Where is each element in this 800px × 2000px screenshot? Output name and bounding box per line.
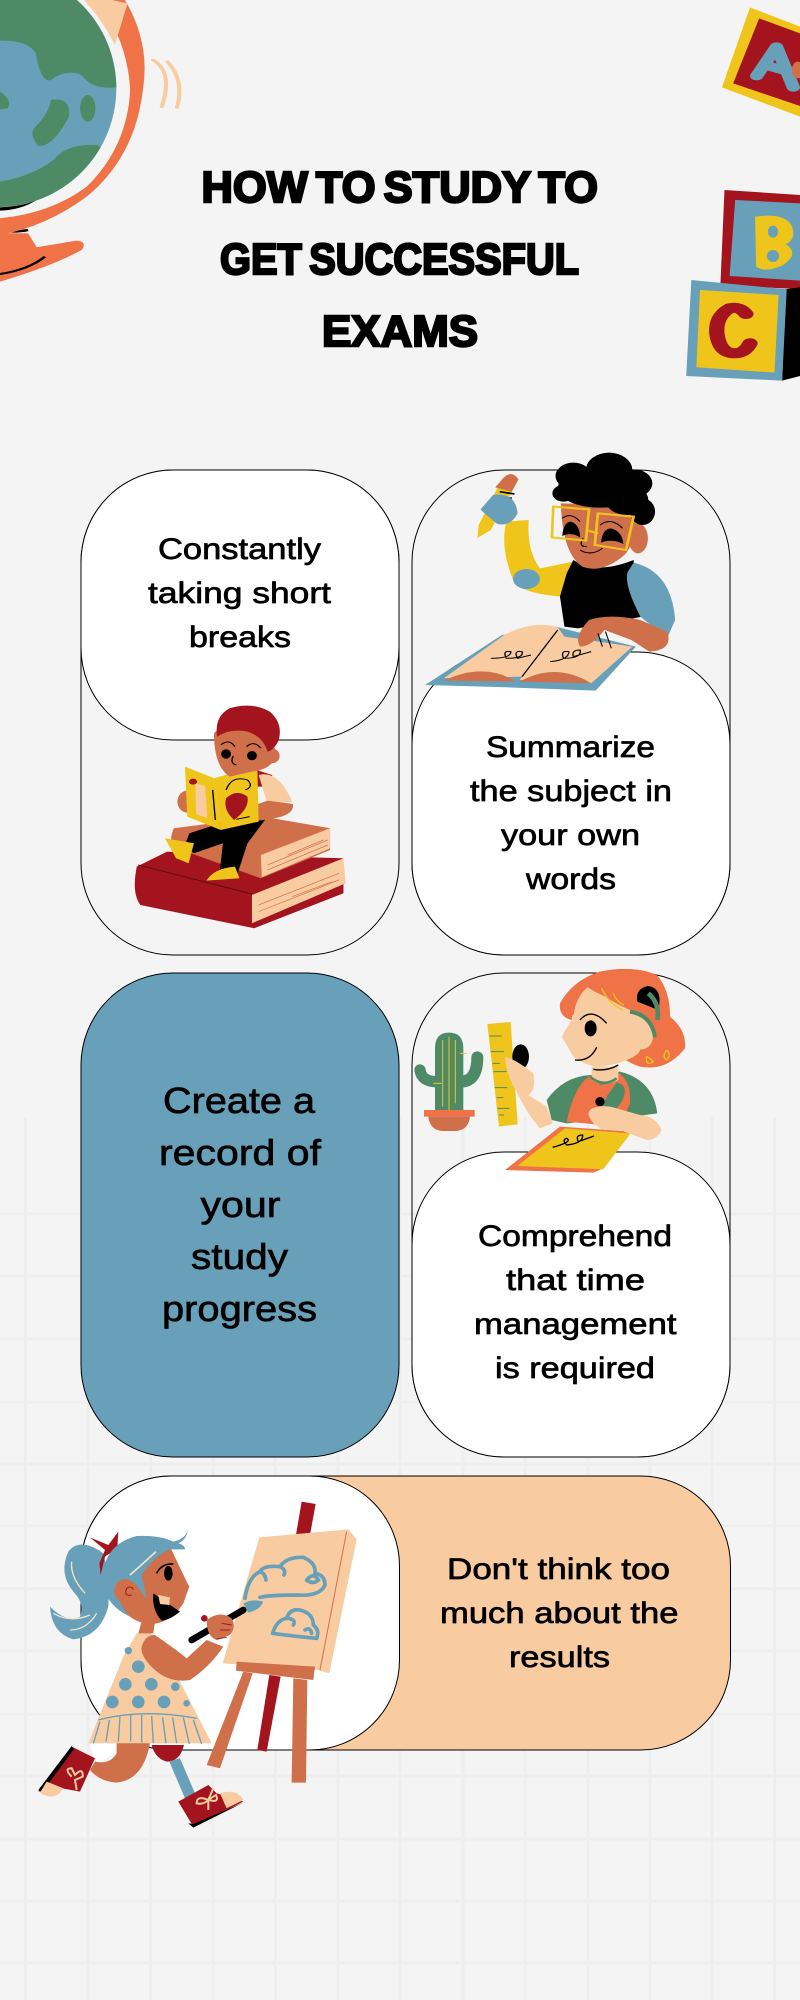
text: results bbox=[440, 1553, 678, 1674]
panel: record of progress bbox=[81, 973, 399, 1457]
text: time management: is required bbox=[495, 1352, 655, 1385]
text: time management: management bbox=[474, 1308, 677, 1341]
text: results: results bbox=[509, 1641, 610, 1674]
text: summarize bbox=[470, 731, 672, 896]
text: results: much about the bbox=[440, 1597, 678, 1630]
text: summarize: your own bbox=[501, 819, 640, 852]
panel: results bbox=[38, 1476, 730, 1828]
text: summarize: words bbox=[525, 863, 616, 896]
icon: child reading on books bbox=[135, 706, 346, 928]
panel: record of progress: your bbox=[200, 1184, 281, 1225]
panel: short breaks bbox=[81, 470, 399, 955]
text: short breaks: taking short bbox=[148, 577, 332, 610]
panel: record of progress: record of bbox=[159, 1132, 322, 1173]
title: GET SUCCESSFUL bbox=[220, 235, 579, 284]
text: time management bbox=[474, 1220, 677, 1385]
icon: globe bbox=[0, 0, 179, 282]
icon: alphabet block C bbox=[686, 280, 800, 381]
panel: record of progress: Create a bbox=[163, 1080, 316, 1121]
icon: student with glasses and book bbox=[425, 453, 675, 691]
text: time management: that time bbox=[506, 1264, 645, 1297]
title: HOW TO STUDY TO bbox=[202, 163, 598, 212]
text: results: Don't think too bbox=[447, 1553, 670, 1586]
panel: time management bbox=[412, 969, 730, 1457]
panel: record of progress: progress bbox=[162, 1288, 317, 1329]
text: short breaks: Constantly bbox=[158, 533, 321, 566]
text: time management: Comprehend bbox=[478, 1220, 672, 1253]
text: short breaks bbox=[148, 533, 332, 654]
icon: easel and canvas bbox=[207, 1502, 357, 1783]
text: summarize: Summarize bbox=[486, 731, 655, 764]
panel: record of progress: study bbox=[191, 1236, 288, 1277]
title: EXAMS bbox=[322, 307, 478, 356]
icon: alphabet block B bbox=[720, 190, 800, 289]
icon: alphabet block A bbox=[722, 7, 800, 117]
text: short breaks: breaks bbox=[189, 621, 291, 654]
icon: girl painting bbox=[38, 1528, 263, 1828]
title bbox=[202, 163, 598, 356]
text: summarize: the subject in bbox=[470, 775, 672, 808]
icon: girl with ruler and paper bbox=[487, 969, 685, 1173]
panel: summarize bbox=[412, 453, 730, 955]
icon: cactus bbox=[420, 1033, 477, 1131]
